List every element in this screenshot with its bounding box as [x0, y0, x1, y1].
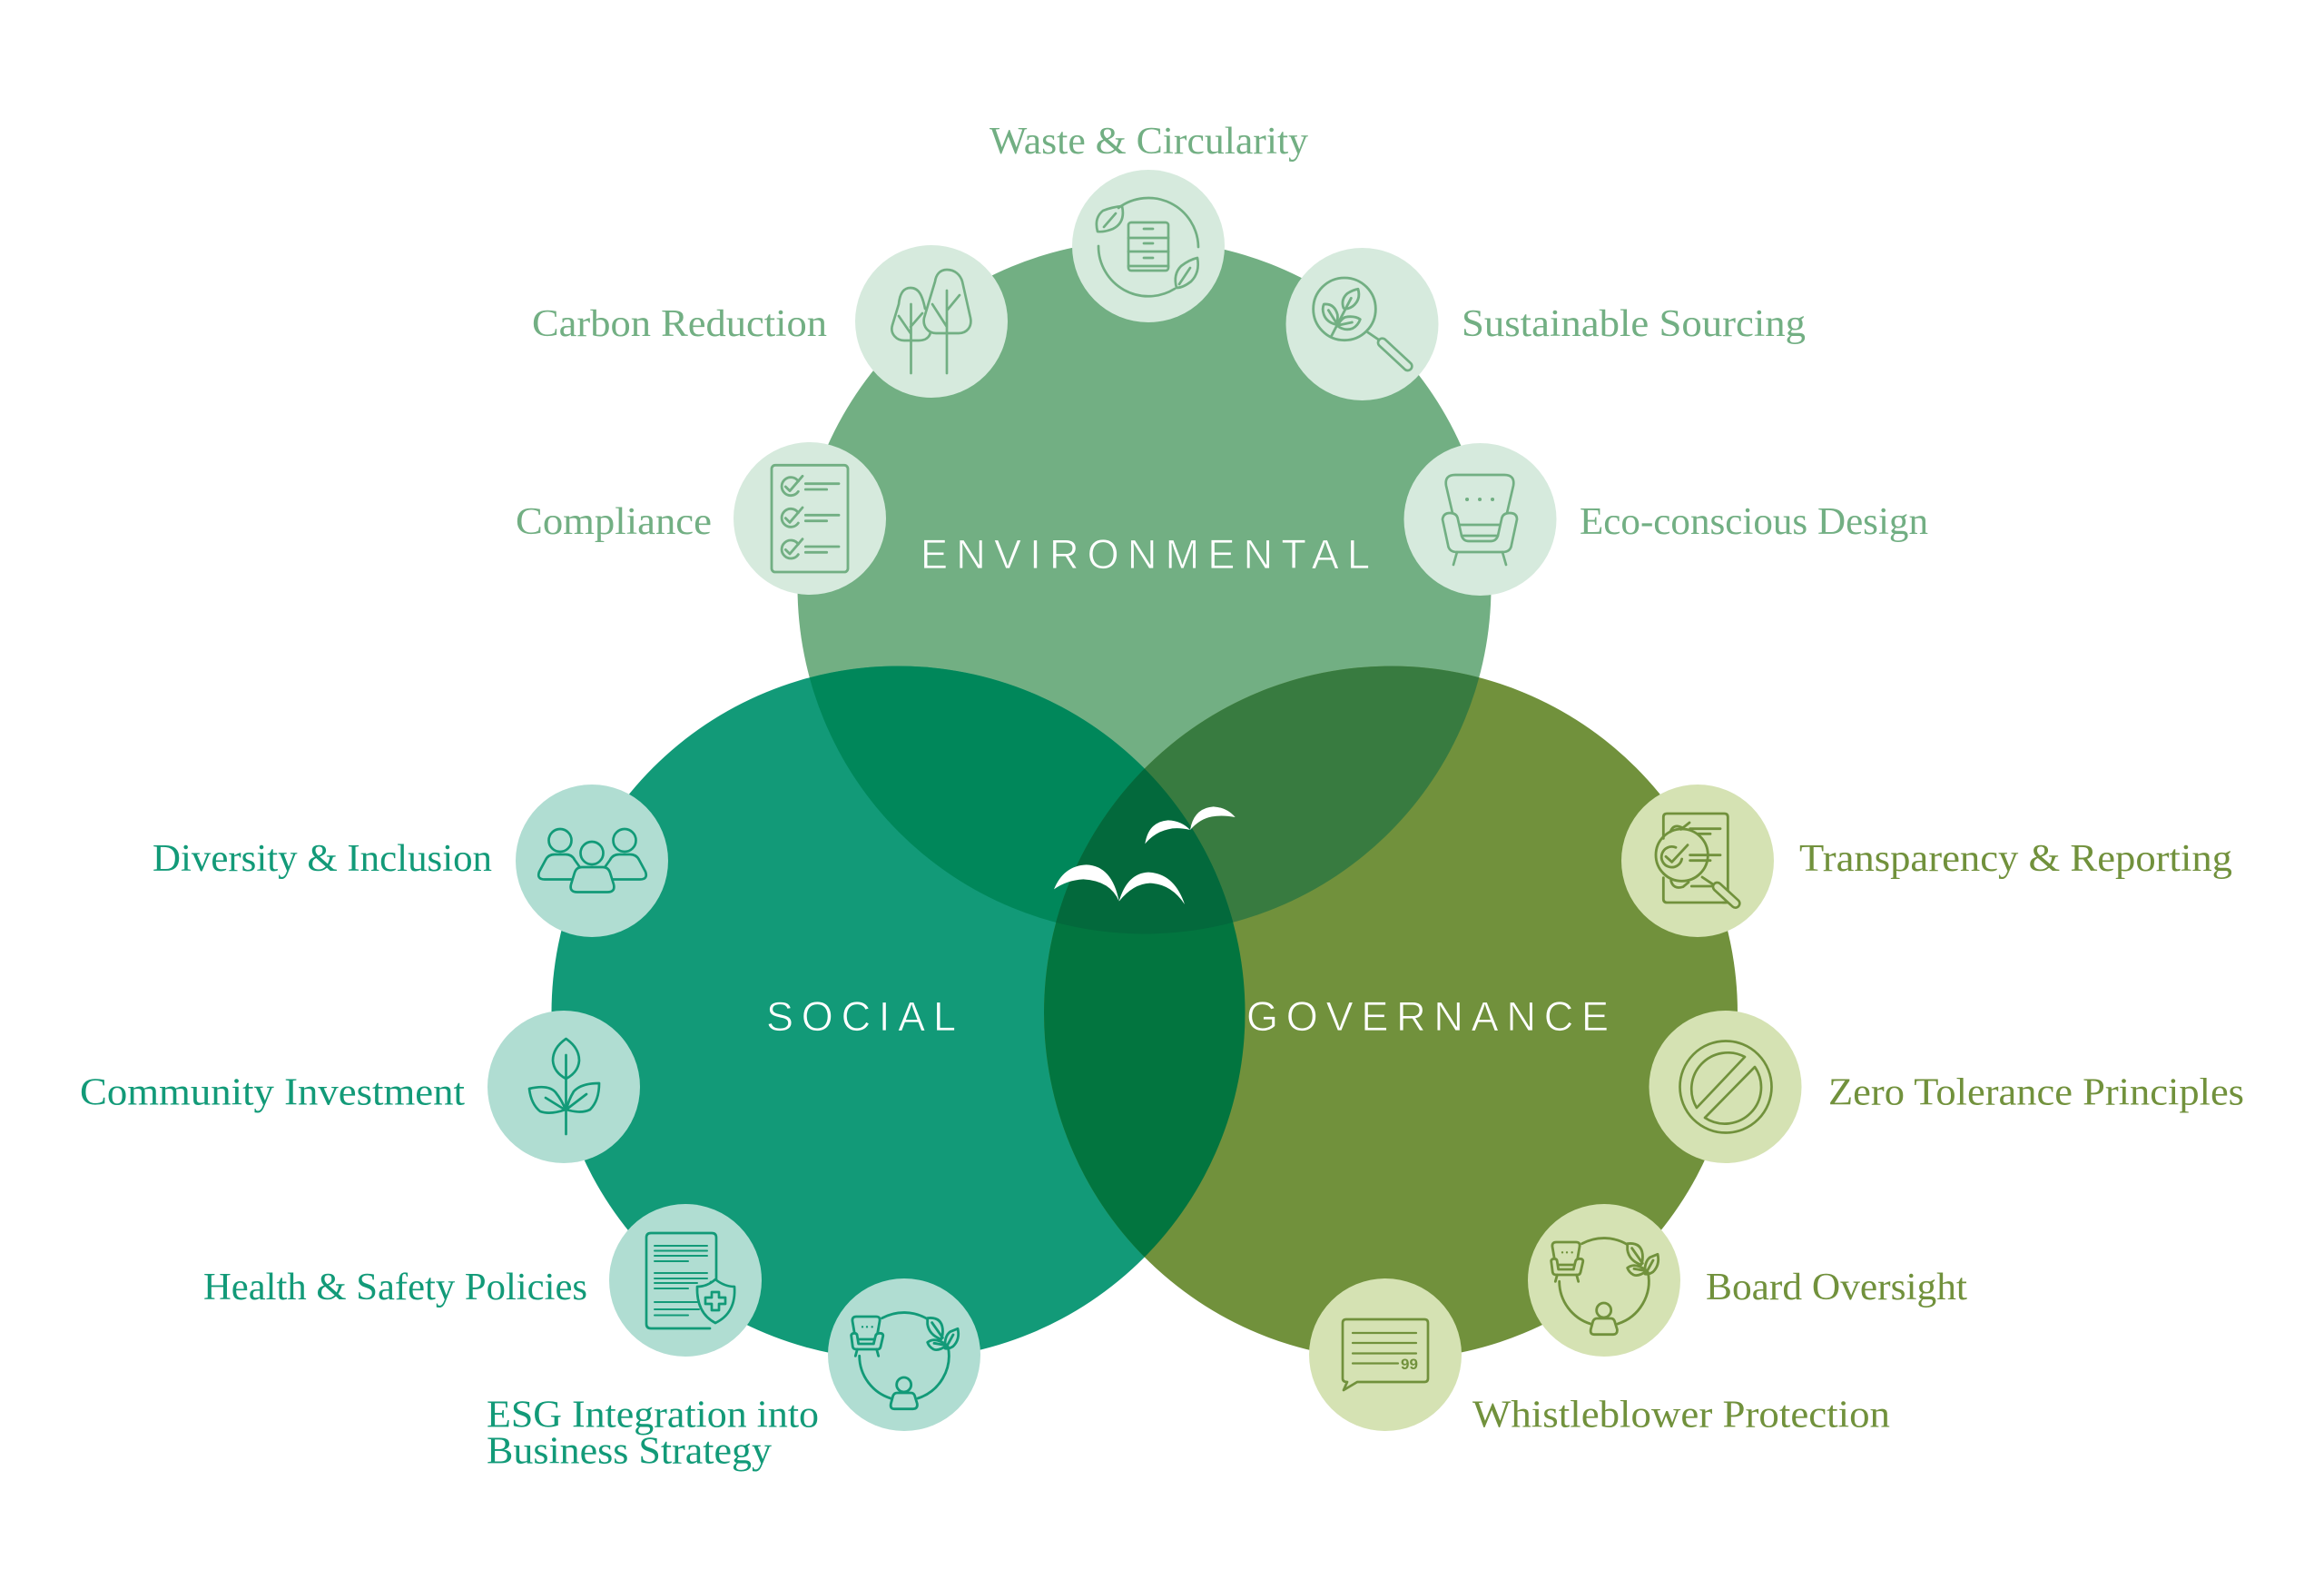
overlap: environmental and governance — [1145, 666, 1480, 923]
icon badge — [1072, 170, 1225, 322]
item: Eco-conscious Design — [1403, 443, 1928, 596]
icon: prohibition sign — [1679, 1041, 1772, 1133]
icon badge — [1528, 1204, 1680, 1357]
circle: environmental — [797, 240, 1491, 933]
item: Whistleblower Protection — [1309, 1278, 1890, 1436]
icon: chair, leaves and person cycle — [1551, 1239, 1659, 1335]
label: Business Strategy — [487, 1431, 772, 1473]
item: Community Investment — [80, 1011, 640, 1163]
item: Health & Safety Policies — [203, 1204, 762, 1357]
item: Compliance — [516, 442, 886, 595]
item: Zero Tolerance Principles — [1649, 1011, 2244, 1163]
label: ESG Integration into — [487, 1395, 819, 1436]
item: Sustainable Sourcing — [1285, 248, 1806, 400]
item: Waste & Circularity — [990, 121, 1308, 322]
label: Community Investment — [80, 1071, 465, 1113]
label: Sustainable Sourcing — [1462, 303, 1806, 345]
label: Compliance — [516, 501, 712, 543]
icon: speech bubble: 99 — [1401, 1356, 1418, 1373]
overlap: social and governance — [1044, 768, 1246, 1257]
label: Transparency & Reporting — [1799, 838, 2232, 880]
icon: recycling cabinet — [1097, 198, 1198, 296]
icon: speech bubble — [1343, 1319, 1428, 1390]
icon badge — [1621, 785, 1774, 937]
icon: chair, leaves and person cycle — [852, 1313, 959, 1409]
label: Waste & Circularity — [990, 121, 1308, 163]
icon badge — [1403, 443, 1556, 596]
icon badge — [734, 442, 886, 595]
icon badge — [1649, 1011, 1801, 1163]
icon: magnifier with leaves — [1314, 278, 1408, 366]
icon badge — [828, 1278, 980, 1431]
heading: environmental: ENVIRONMENTAL — [921, 531, 1370, 577]
circle: governance — [1044, 666, 1738, 1360]
icon: birds — [1054, 806, 1236, 904]
icon: armchair — [1443, 475, 1517, 565]
overlap: environmental and social — [810, 666, 1233, 923]
icon badge — [609, 1204, 762, 1357]
label: Board Oversight — [1706, 1267, 1967, 1308]
icon badge — [1285, 248, 1438, 400]
icon: document with shield — [646, 1233, 734, 1328]
icon: trees — [891, 270, 970, 373]
icon badge — [487, 1011, 640, 1163]
label: Health & Safety Policies — [203, 1267, 587, 1308]
icon: checklist — [772, 465, 848, 572]
item: Board Oversight — [1528, 1204, 1967, 1357]
label: Whistleblower Protection — [1472, 1395, 1890, 1436]
icon badge — [1309, 1278, 1462, 1431]
label: Eco-conscious Design — [1580, 501, 1928, 543]
item: ESG Integration into Business Strategy — [487, 1278, 980, 1473]
item: Diversity & Inclusion — [153, 785, 668, 937]
label: Zero Tolerance Principles — [1828, 1071, 2244, 1113]
icon: report under magnifier — [1656, 814, 1736, 903]
icon: people — [538, 829, 646, 892]
venn diagram — [552, 240, 1738, 1360]
circle: social — [552, 666, 1246, 1360]
heading: social: SOCIAL — [766, 993, 956, 1040]
overlap: centre — [1057, 768, 1233, 933]
label: Diversity & Inclusion — [153, 838, 492, 880]
item: Transparency & Reporting — [1621, 785, 2232, 937]
item: Carbon Reduction — [532, 245, 1008, 398]
heading: governance: GOVERNANCE — [1246, 993, 1609, 1040]
icon: plant — [529, 1039, 599, 1134]
icon badge — [516, 785, 668, 937]
label: Carbon Reduction — [532, 303, 827, 345]
icon badge — [855, 245, 1008, 398]
